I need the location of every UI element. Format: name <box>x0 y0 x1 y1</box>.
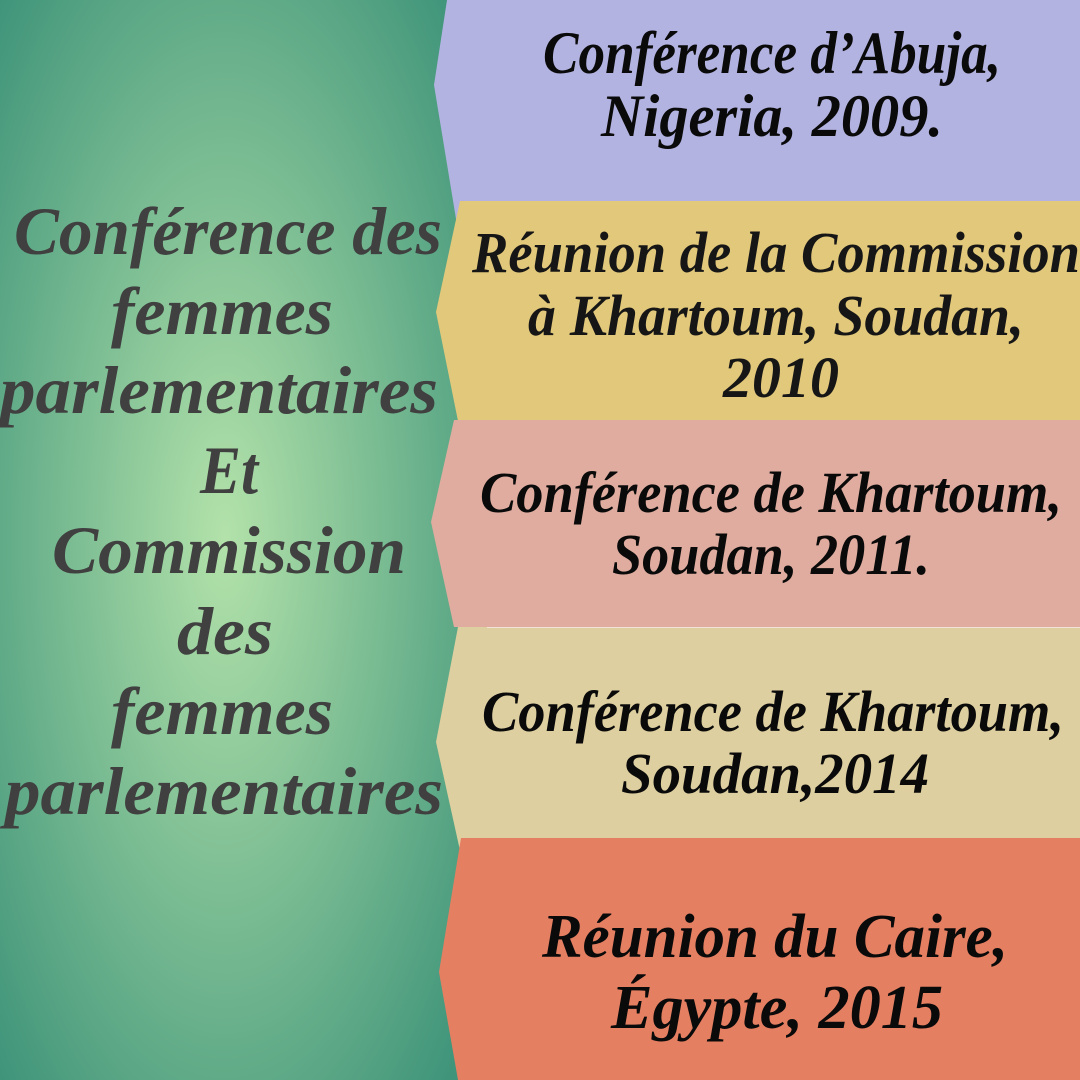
panel: Khartoum 2010: à Khartoum, Soudan, <box>528 283 1024 348</box>
panel: Khartoum 2010: 2010 <box>722 345 839 410</box>
main title: Conférence des <box>14 193 442 269</box>
main title: Commission <box>52 512 406 588</box>
main title: femmes <box>111 273 333 349</box>
panel: Khartoum 2010 <box>436 201 1080 421</box>
panel: Khartoum 2011: Soudan, 2011. <box>612 522 930 587</box>
panel: Le Caire 2015: Égypte, 2015 <box>610 974 943 1042</box>
main title: des <box>177 593 273 669</box>
panel: Le Caire 2015 <box>439 838 1080 1080</box>
panel: Le Caire 2015: Réunion du Caire, <box>541 903 1008 971</box>
panel: Khartoum 2011 <box>431 420 1080 628</box>
panel: Khartoum 2014 <box>436 627 1080 855</box>
panel: Abuja 2009 <box>434 0 1080 225</box>
panel: Abuja 2009: Nigeria, 2009. <box>600 83 943 149</box>
main title: parlementaires <box>0 352 438 428</box>
main title <box>0 193 443 829</box>
panel: Khartoum 2014: Soudan,2014 <box>621 741 929 806</box>
main title: femmes <box>111 673 333 749</box>
panel: Abuja 2009: Conférence d’Abuja, <box>543 20 1001 86</box>
left gradient background panel <box>0 0 470 1080</box>
main title: parlementaires <box>0 753 443 829</box>
main title: Et <box>199 432 260 508</box>
